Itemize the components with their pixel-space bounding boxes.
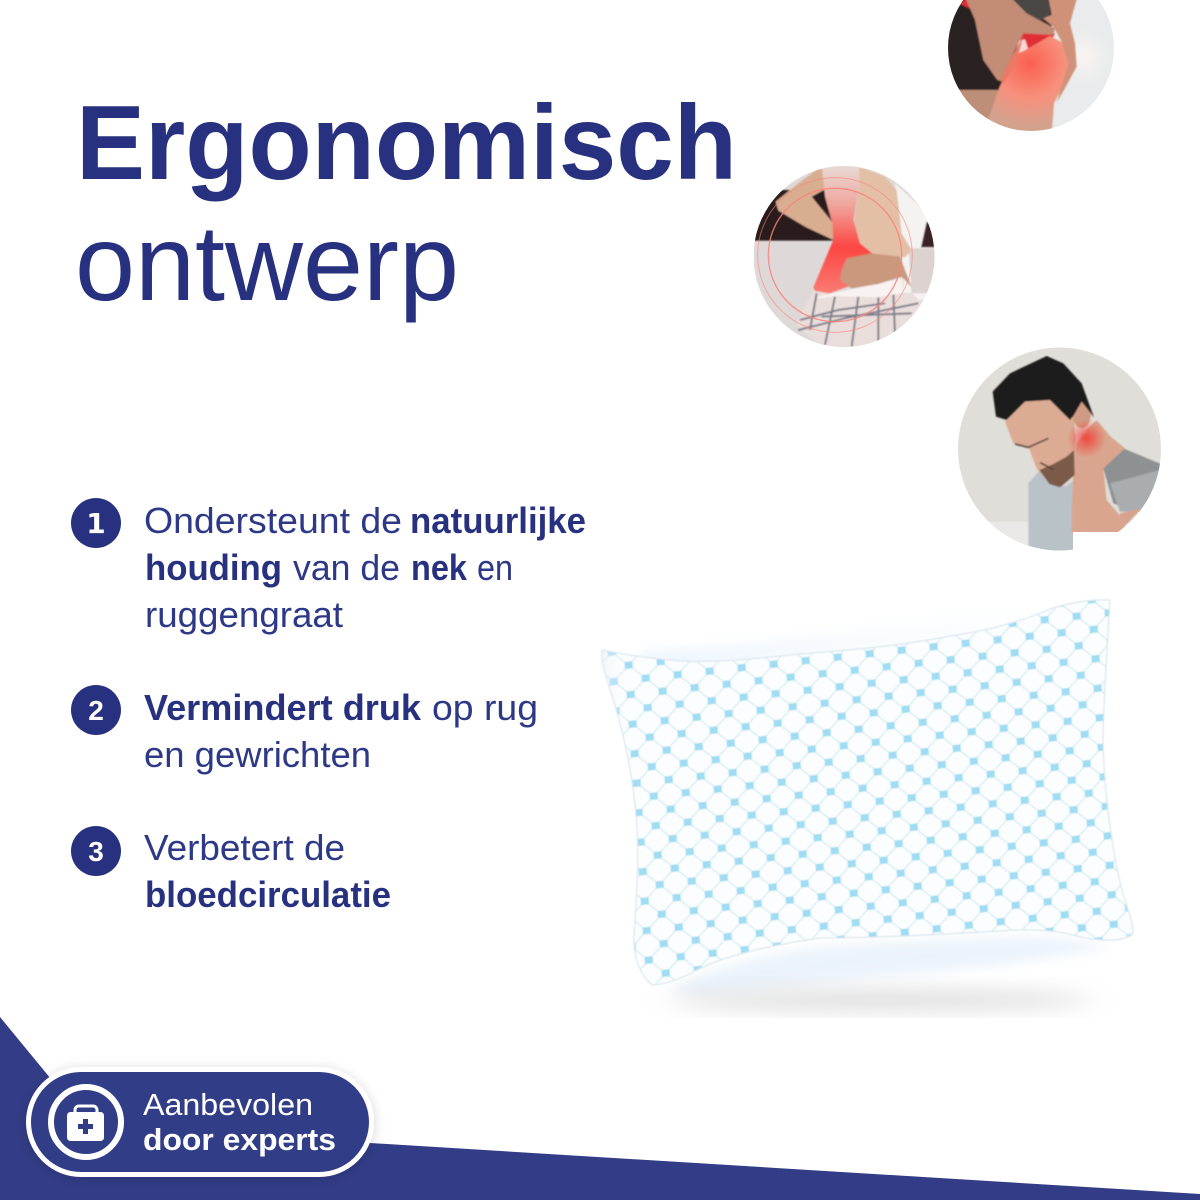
pillow shadow xyxy=(600,992,1200,1048)
benefit 1 text: nek xyxy=(411,547,468,588)
benefit 3 xyxy=(71,826,391,915)
benefit 2 xyxy=(71,685,538,775)
benefit 2 text: op rug xyxy=(432,687,538,728)
benefit 1 text: ruggengraat xyxy=(145,594,343,635)
benefit 3 text: Verbetert de xyxy=(144,827,345,868)
benefit 1 text: en xyxy=(477,547,513,588)
pillow body xyxy=(600,599,1134,986)
icon: first aid case xyxy=(51,1087,121,1157)
benefit 1 text: natuurlijke xyxy=(410,500,586,541)
benefit 2 text: Vermindert druk xyxy=(144,687,422,728)
benefit 1 text xyxy=(144,500,586,635)
pillow glow xyxy=(640,595,1110,995)
benefit 3 text xyxy=(144,827,391,915)
photo: knee pain xyxy=(943,0,1114,135)
bottom diagonal band xyxy=(0,1017,1200,1200)
title: Ergonomisch xyxy=(76,84,737,202)
number badge 1: 1 xyxy=(86,507,106,540)
number badge 2: 2 xyxy=(88,695,104,726)
badge text: Aanbevolen xyxy=(143,1087,313,1122)
number badge 1 xyxy=(71,498,121,548)
benefit 1 text: van de xyxy=(293,547,400,588)
benefit 3 text: bloedcirculatie xyxy=(145,874,391,915)
photo: neck pain xyxy=(958,347,1165,556)
number badge 3 xyxy=(71,826,121,876)
title: ontwerp xyxy=(75,202,459,323)
badge text: door experts xyxy=(143,1122,336,1157)
benefit 2 text: en gewrichten xyxy=(144,734,371,775)
badge: recommended by experts xyxy=(28,1070,372,1174)
number badge 2 xyxy=(71,685,121,735)
photo: back pain xyxy=(752,165,938,348)
benefit 2 text xyxy=(144,687,538,775)
number badge 3: 3 xyxy=(88,836,104,867)
benefit 1 text: houding xyxy=(145,547,282,588)
pillow with floating shadow xyxy=(600,599,1134,1017)
title xyxy=(75,84,737,323)
badge text xyxy=(143,1087,336,1157)
benefit 1 text: Ondersteunt de xyxy=(144,500,402,541)
benefit 1 xyxy=(71,498,586,635)
